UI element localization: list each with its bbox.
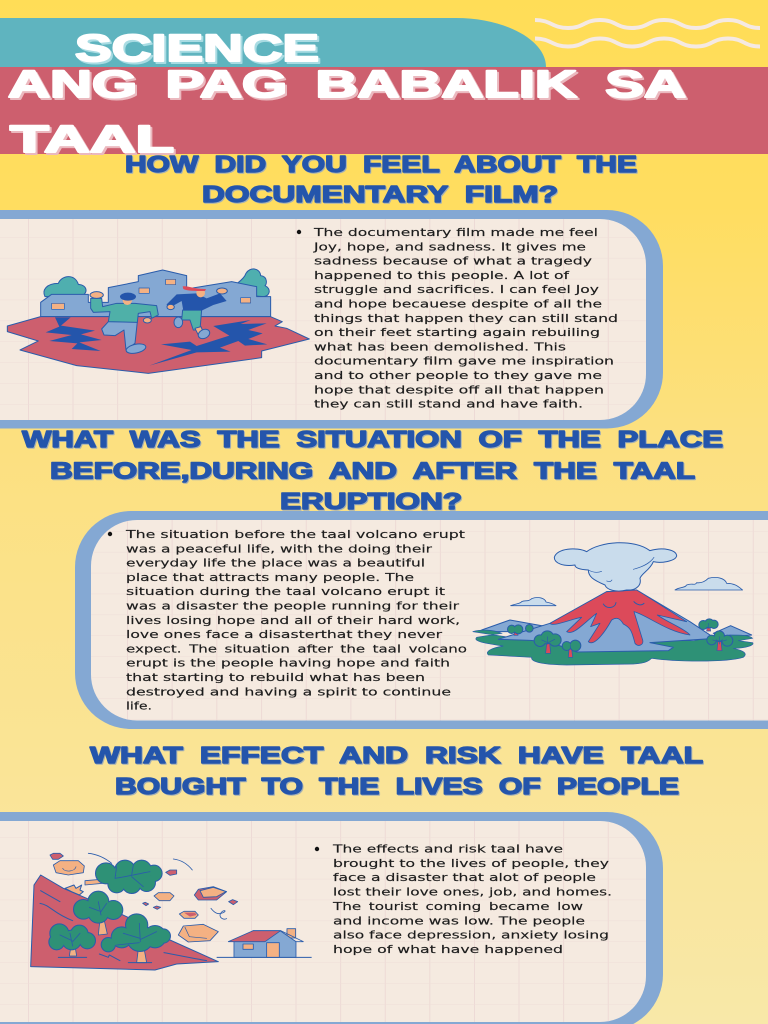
main title (8, 64, 686, 161)
text block: effects: hope of what have happened (333, 943, 563, 956)
text block: effects: face a disaster that alot of people (333, 871, 596, 884)
panel: effects and risks (0, 812, 663, 1024)
text block: situation: that starting to rebuild what has been (126, 671, 425, 684)
main title: ANG PAG BABALIK SA (8, 64, 686, 106)
text block: effects: brought to the lives of people, they (333, 857, 610, 870)
text block: situation: place that attracts many people. The (126, 571, 414, 584)
text block: feelings: on their feet starting again rebuiling (314, 326, 600, 339)
text block: effects: The effects and risk taal have (332, 842, 563, 856)
text block: situation: lives losing hope and all of their hard work, (126, 614, 460, 627)
text block: feelings: Joy, hope, and sadness. It gives me (313, 240, 586, 253)
text block: feelings: and hope becauese despite of all the (314, 298, 602, 310)
illustration: people running from cracked ground (7, 269, 309, 373)
text block: situation: love ones face a disasterthat they never (126, 628, 443, 641)
decorative white waves (535, 20, 760, 46)
text block: feelings: hope that despite off all that happen (314, 383, 604, 396)
teal title banner (0, 18, 546, 67)
text block: feelings: and to other people to they gave me (314, 369, 602, 382)
text block: feelings: struggle and sacrifices. I can feel Joy (314, 283, 600, 296)
text block: situation (125, 528, 467, 713)
text block: feelings: The documentary film made me feel (313, 226, 598, 239)
bullet (315, 847, 319, 851)
text block: situation: was a disaster the people running for their (126, 600, 460, 612)
text block: situation: erupt is the people having hope and faith (126, 657, 450, 670)
panel: feelings about the film (0, 210, 663, 428)
text block: effects: and income was low. The people (333, 914, 585, 927)
main title: TAAL (10, 119, 174, 161)
text block: situation: life. (126, 700, 152, 713)
text block: situation: The situation before the taal volcano erupt (125, 528, 466, 541)
panel: situation before during after (75, 511, 768, 729)
text block: feelings: happened to this people. A lot of (314, 269, 571, 282)
bullet (108, 532, 112, 536)
text block: feelings: what has been demolished. This (314, 340, 566, 353)
text block: feelings: sadness because of what a tragedy (314, 255, 593, 268)
text block: situation: situation during the taal volcano erupt it (126, 585, 446, 598)
text block: effects (332, 842, 612, 956)
text block: situation: expect. The situation after the taal volcano (126, 642, 467, 655)
heading: how did you feel: HOW DID YOU FEEL ABOUT THE (125, 151, 637, 177)
illustration: erupting volcano (473, 543, 753, 665)
heading: situation of the place: ERUPTION? (280, 488, 462, 514)
text block: situation: was a peaceful life, with the doing their (126, 542, 433, 555)
text block: effects: lost their love ones, job, and homes. (333, 886, 612, 899)
text block: situation: everyday life the place was a beautiful (126, 557, 425, 570)
heading: situation of the place (22, 426, 723, 514)
text block: feelings: things that happen they can still stand (314, 312, 618, 325)
text block: feelings (313, 226, 618, 411)
heading: effect and risk: BOUGHT TO THE LIVES OF PEOPLE (115, 773, 679, 799)
heading: situation of the place: WHAT WAS THE SITUATION OF THE PLACE (22, 426, 723, 452)
text block: situation: destroyed and having a spirit to continue (126, 685, 451, 698)
subject heading: science: SCIENCE (75, 28, 319, 70)
red title banner (0, 67, 768, 154)
illustration: landslide and house (31, 853, 312, 970)
heading: effect and risk: WHAT EFFECT AND RISK HAVE TAAL (90, 742, 703, 768)
text block: feelings: they can still stand and have faith. (314, 398, 583, 411)
heading: how did you feel: DOCUMENTARY FILM? (202, 181, 558, 207)
text block: effects: The tourist coming became low (332, 900, 583, 913)
text block: effects: also face depression, anxiety losing (333, 929, 609, 942)
heading: how did you feel (125, 151, 637, 207)
bullet (297, 230, 301, 234)
heading: situation of the place: BEFORE,DURING AND AFTER THE TAAL (50, 458, 695, 484)
heading: effect and risk (90, 742, 703, 799)
text block: feelings: documentary film gave me inspiration (314, 355, 614, 368)
